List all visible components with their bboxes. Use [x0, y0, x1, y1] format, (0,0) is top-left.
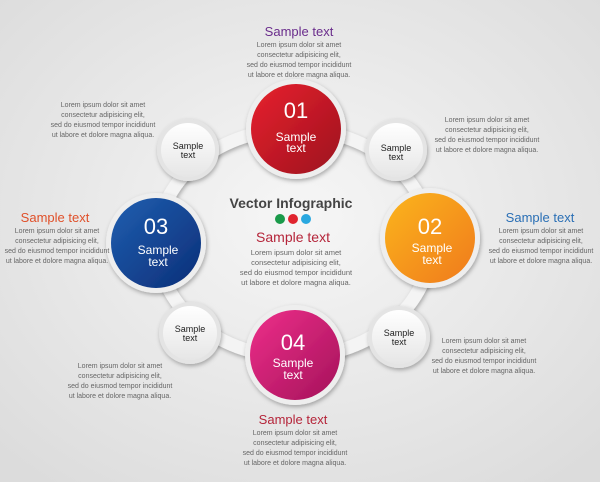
text 03: [5, 210, 109, 265]
circle 03: text: [148, 255, 168, 269]
small circles: text: [392, 337, 407, 347]
circle 02: text: [422, 253, 442, 267]
text bottom-left: sed do eiusmod tempor incididunt: [68, 383, 172, 390]
text 03: ut labore et dolore magna aliqua.: [6, 258, 108, 265]
text 01: consectetur adipisicing elit,: [257, 52, 341, 59]
text 02: Sample text: [506, 210, 575, 225]
small circles: text: [389, 152, 404, 162]
center title: Lorem ipsum dolor sit amet: [251, 248, 342, 257]
small circles: Sample: [173, 141, 203, 151]
circle 01: [246, 79, 346, 179]
text top-left: Lorem ipsum dolor sit amet: [61, 102, 145, 109]
text bottom-right: ut labore et dolore magna aliqua.: [433, 368, 535, 375]
text 01: [247, 24, 351, 79]
center title: Vector Infographic: [230, 195, 353, 211]
text 04: ut labore et dolore magna aliqua.: [244, 460, 346, 467]
small circles: text: [181, 150, 196, 160]
text 02: [489, 210, 593, 265]
circle 03: 03: [144, 214, 168, 239]
text 04: [243, 412, 347, 467]
text 02: sed do eiusmod tempor incididunt: [489, 248, 593, 255]
circle 03: Sample: [138, 243, 179, 257]
circle 04: 04: [281, 330, 305, 355]
small circles: Sample: [175, 324, 205, 334]
text bottom-left: [68, 363, 172, 400]
circle 03: [106, 193, 206, 293]
small circles: [157, 119, 430, 368]
text 01: Sample text: [265, 24, 334, 39]
text 01: ut labore et dolore magna aliqua.: [248, 72, 350, 79]
center title: [230, 195, 353, 287]
text bottom-right: consectetur adipisicing elit,: [442, 348, 526, 355]
small circles: text: [183, 333, 198, 343]
ring: [157, 129, 431, 357]
center title: consectetur adipisicing elit,: [251, 258, 341, 267]
circle 02: [380, 188, 480, 288]
text 01: sed do eiusmod tempor incididunt: [247, 62, 351, 69]
text top-right: ut labore et dolore magna aliqua.: [436, 147, 538, 154]
text 02: consectetur adipisicing elit,: [499, 238, 583, 245]
text top-left: [51, 102, 155, 139]
text top-right: consectetur adipisicing elit,: [445, 127, 529, 134]
circle 04: text: [283, 368, 303, 382]
circle 01: text: [286, 141, 306, 155]
text top-right: sed do eiusmod tempor incididunt: [435, 137, 539, 144]
small circles: Sample: [381, 143, 411, 153]
text bottom-left: consectetur adipisicing elit,: [78, 373, 162, 380]
text 01: Lorem ipsum dolor sit amet: [257, 42, 341, 49]
circle 02: Sample: [412, 241, 453, 255]
text 04: Lorem ipsum dolor sit amet: [253, 430, 337, 437]
text bottom-left: ut labore et dolore magna aliqua.: [69, 393, 171, 400]
text bottom-right: Lorem ipsum dolor sit amet: [442, 338, 526, 345]
text top-left: ut labore et dolore magna aliqua.: [52, 132, 154, 139]
text 04: sed do eiusmod tempor incididunt: [243, 450, 347, 457]
text bottom-left: Lorem ipsum dolor sit amet: [78, 363, 162, 370]
text top-left: sed do eiusmod tempor incididunt: [51, 122, 155, 129]
circle 02: 02: [418, 214, 442, 239]
circle 04: [245, 305, 345, 405]
center title: Sample text: [256, 229, 330, 245]
text 03: sed do eiusmod tempor incididunt: [5, 248, 109, 255]
text top-right: [435, 117, 539, 154]
center title: ut labore et dolore magna aliqua.: [241, 278, 351, 287]
text 03: Lorem ipsum dolor sit amet: [15, 228, 99, 235]
text bottom-right: [432, 338, 536, 375]
text top-left: consectetur adipisicing elit,: [61, 112, 145, 119]
circle 01: Sample: [276, 130, 317, 144]
center title: sed do eiusmod tempor incididunt: [240, 268, 353, 277]
text top-right: Lorem ipsum dolor sit amet: [445, 117, 529, 124]
text 03: consectetur adipisicing elit,: [15, 238, 99, 245]
circle 04: Sample: [273, 356, 314, 370]
text bottom-right: sed do eiusmod tempor incididunt: [432, 358, 536, 365]
text 02: Lorem ipsum dolor sit amet: [499, 228, 583, 235]
text 04: consectetur adipisicing elit,: [253, 440, 337, 447]
text 03: Sample text: [21, 210, 90, 225]
text 04: Sample text: [259, 412, 328, 427]
text 02: ut labore et dolore magna aliqua.: [490, 258, 592, 265]
circle 01: 01: [284, 98, 308, 123]
small circles: Sample: [384, 328, 414, 338]
